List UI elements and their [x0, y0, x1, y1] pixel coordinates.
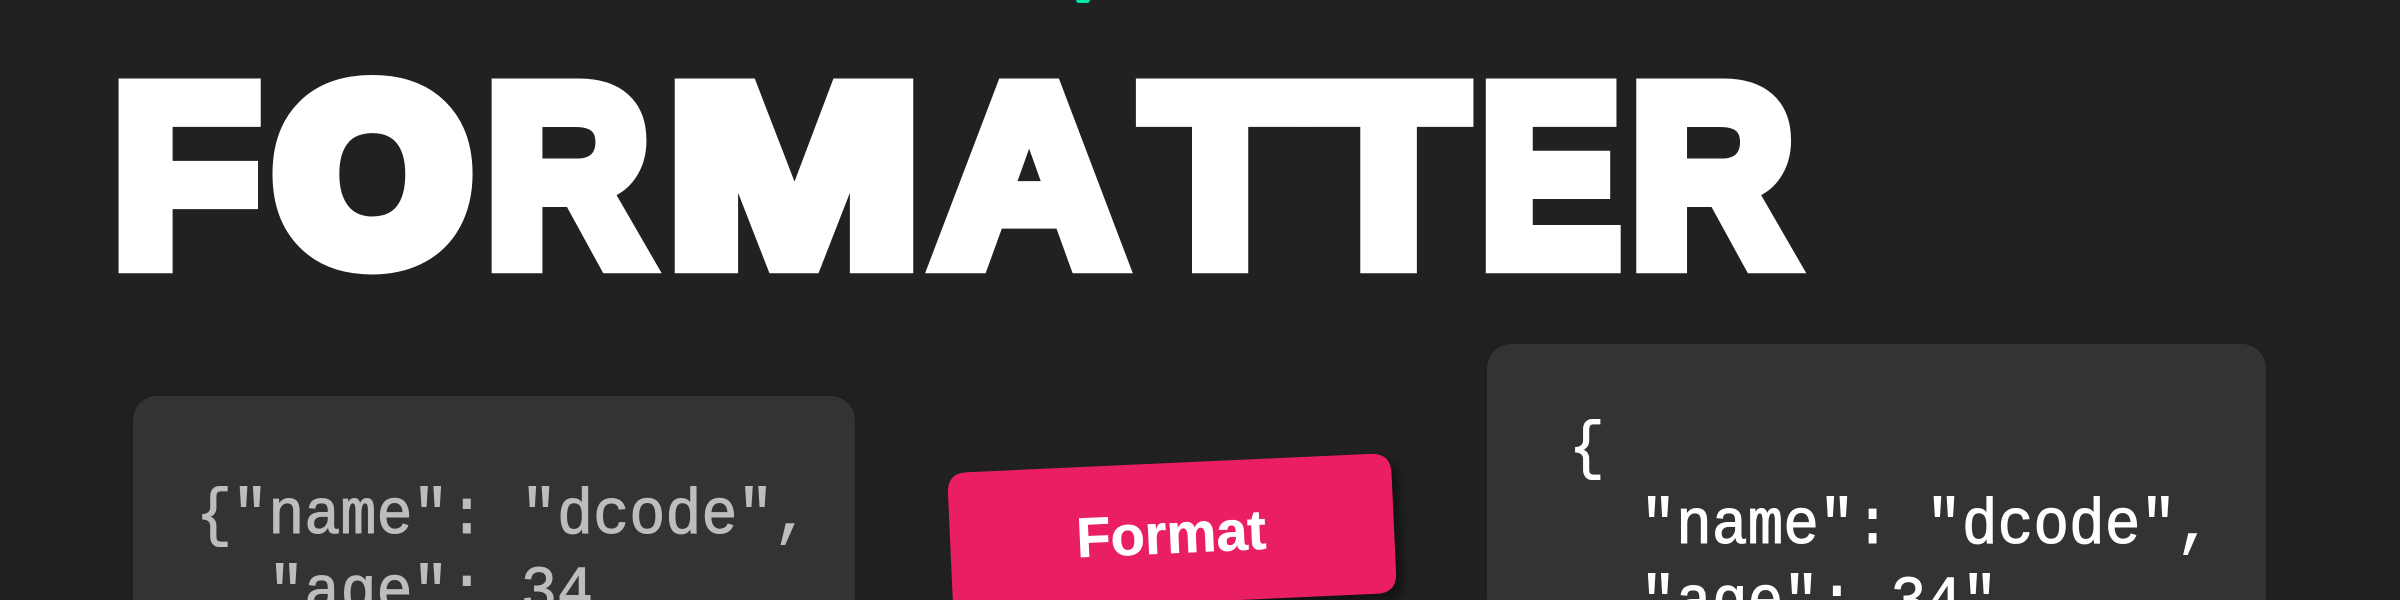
format button: [948, 454, 1402, 600]
title: FORMATTER: [112, 33, 1806, 300]
format button: Format: [1075, 498, 1267, 569]
panel: input JSON: [133, 396, 855, 600]
title: FORMATTER: O: [278, 42, 467, 300]
panel: formatted JSON: [1487, 344, 2266, 600]
teal dot from cropped text above: [1076, 0, 1090, 3]
